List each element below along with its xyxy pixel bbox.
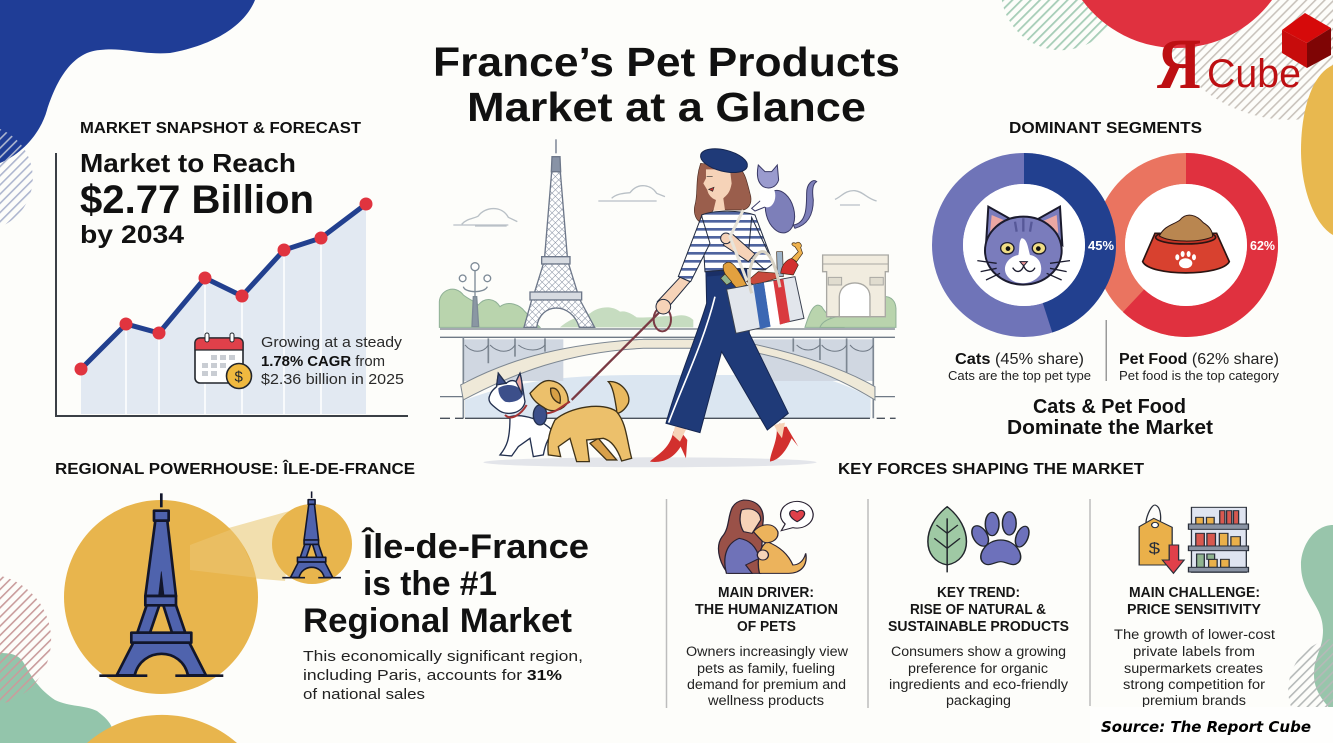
- zoom beam outer: [225, 510, 293, 581]
- headline: market to reach: Market to Reach: [80, 148, 296, 178]
- label: pet food: Pet Food (62% share): [1119, 351, 1279, 368]
- text: key trend: Consumers show a growing: [891, 644, 1066, 659]
- text: key trend: preference for organic: [908, 661, 1048, 676]
- bag strap: [730, 210, 752, 293]
- text: regional description: of national sales: [303, 686, 425, 703]
- groceries: [721, 242, 803, 288]
- text: main challenge: The growth of lower-cost: [1114, 627, 1275, 642]
- headline: regional market: Regional Market: [303, 602, 572, 640]
- label: cats: Cats (45% share): [955, 351, 1084, 368]
- donut chart: pet food: [1110, 168, 1275, 322]
- column: main driver: [686, 500, 848, 708]
- logo: RCube: Cube: [1207, 52, 1301, 96]
- title: Market at a Glance: [467, 84, 866, 130]
- label: pet food: Pet food is the top category: [1119, 369, 1280, 383]
- panel: dominant segments: [948, 120, 1280, 439]
- beret: [698, 145, 750, 177]
- text: main driver: OF PETS: [737, 619, 796, 635]
- donut chart: cats: 45%: [1088, 239, 1114, 253]
- heading: dominant segments: DOMINANT SEGMENTS: [1009, 120, 1202, 137]
- callout: cats and pet food dominate: Cats & Pet Food: [1033, 396, 1186, 418]
- icon: owner hugging dog: [719, 500, 813, 573]
- label: cats: [948, 351, 1091, 383]
- icon: calendar with coin: $: [234, 368, 244, 386]
- text: CAGR note: $2.36 billion in 2025: [261, 372, 404, 388]
- text: regional description: [303, 648, 583, 703]
- icon: large Eiffel Tower: [99, 493, 223, 676]
- river: [465, 375, 871, 418]
- panel: regional powerhouse: [55, 459, 589, 703]
- leash: [572, 307, 671, 400]
- callout: cats and pet food dominate: Dominate the Market: [1007, 417, 1213, 439]
- source credit: Source: The Report Cube: [1101, 718, 1311, 736]
- headline: market to reach: $2.77 Billion: [80, 178, 314, 222]
- striped shirt: [656, 211, 773, 314]
- label: cats: Cats are the top pet type: [948, 369, 1091, 383]
- text: main driver: [686, 585, 848, 708]
- text: key trend: SUSTAINABLE PRODUCTS: [888, 619, 1069, 635]
- icon: small Eiffel Tower: [282, 491, 341, 578]
- headline: regional market: [303, 528, 589, 640]
- text: main challenge: PRICE SENSITIVITY: [1127, 602, 1261, 618]
- legs and shoes: [650, 267, 798, 462]
- headline: market to reach: [80, 148, 314, 249]
- logo: RCube: Я: [1157, 24, 1201, 104]
- logo: RCube: [1157, 13, 1331, 104]
- panel: key forces shaping the market: [666, 461, 1275, 708]
- headline: regional market: Île-de-France: [361, 528, 589, 566]
- line chart: [56, 153, 408, 416]
- text: main challenge: strong competition for: [1123, 677, 1266, 692]
- icon: calendar with coin: [195, 333, 252, 388]
- text: key trend: packaging: [946, 693, 1011, 708]
- icon: pet food bowl: [1143, 215, 1229, 273]
- text: regional description: This economically significant region,: [303, 648, 583, 665]
- Eiffel Tower sketch: [524, 139, 595, 327]
- text: main challenge: premium brands: [1142, 693, 1246, 708]
- icon: cat face: [977, 207, 1070, 285]
- clouds: [453, 186, 877, 226]
- text: key trend: [888, 585, 1069, 708]
- lamp post: [459, 263, 491, 327]
- text: regional description: including Paris, accounts for 31%: [303, 667, 562, 684]
- hair: [694, 163, 751, 222]
- text: main challenge: [1114, 585, 1275, 708]
- text: main driver: demand for premium and: [687, 677, 846, 692]
- headline: regional market: is the #1: [363, 565, 497, 603]
- ground shadow: [483, 457, 817, 467]
- callout: cats and pet food dominate: [1007, 396, 1213, 439]
- text: main challenge: MAIN CHALLENGE:: [1129, 585, 1260, 601]
- french bulldog: [489, 373, 553, 457]
- source patch background: [1090, 707, 1333, 743]
- woman: [650, 145, 817, 462]
- text: key trend: RISE OF NATURAL &: [910, 602, 1046, 618]
- trees: [439, 289, 896, 327]
- text: main driver: pets as family, fueling: [697, 661, 835, 676]
- text: CAGR note: 1.78% CAGR from: [261, 354, 385, 370]
- face: [703, 169, 732, 211]
- headline: market to reach: by 2034: [80, 221, 184, 249]
- panel: market snapshot and forecast: [56, 120, 408, 416]
- big yellow circle: [64, 500, 258, 694]
- text: main challenge: supermarkets creates: [1124, 661, 1263, 676]
- icon: price tag and shelves: $: [1149, 539, 1160, 557]
- column: key trend: [888, 507, 1069, 708]
- central illustration: Parisian woman walking pets: [439, 139, 896, 467]
- small yellow circle: [272, 504, 352, 584]
- heading: market snapshot: MARKET SNAPSHOT & FORECAST: [80, 120, 361, 137]
- heading: regional powerhouse: REGIONAL POWERHOUSE: ÎLE-DE-FRANCE: [55, 459, 415, 478]
- text: main driver: wellness products: [707, 693, 824, 708]
- text: CAGR note: [261, 335, 404, 388]
- donut chart: cats: [948, 168, 1114, 322]
- golden dog: [530, 381, 632, 462]
- bridge: [440, 329, 896, 418]
- title: France’s Pet Products: [433, 39, 900, 85]
- title: [433, 39, 900, 130]
- column: main challenge: [1114, 505, 1275, 708]
- text: main driver: THE HUMANIZATION: [695, 602, 838, 618]
- tote bag: [727, 252, 804, 333]
- donut chart: pet food: 62%: [1250, 239, 1275, 253]
- icon: price tag and shelves: [1139, 505, 1248, 573]
- cat on shoulder: [752, 165, 817, 236]
- text: key trend: KEY TREND:: [937, 585, 1020, 601]
- Arc de Triomphe: [823, 255, 888, 317]
- text: CAGR note: Growing at a steady: [261, 335, 403, 351]
- text: key trend: ingredients and eco-friendly: [889, 677, 1068, 692]
- text: main driver: MAIN DRIVER:: [718, 585, 814, 601]
- text: main challenge: private labels from: [1133, 644, 1255, 659]
- lips and eye: [707, 177, 714, 191]
- heading: key forces: KEY FORCES SHAPING THE MARKET: [838, 461, 1144, 478]
- zoom beam inner: [190, 528, 258, 578]
- text: main driver: Owners increasingly view: [686, 644, 848, 659]
- icon: leaf and paw: [928, 507, 1032, 572]
- label: pet food: [1119, 351, 1280, 383]
